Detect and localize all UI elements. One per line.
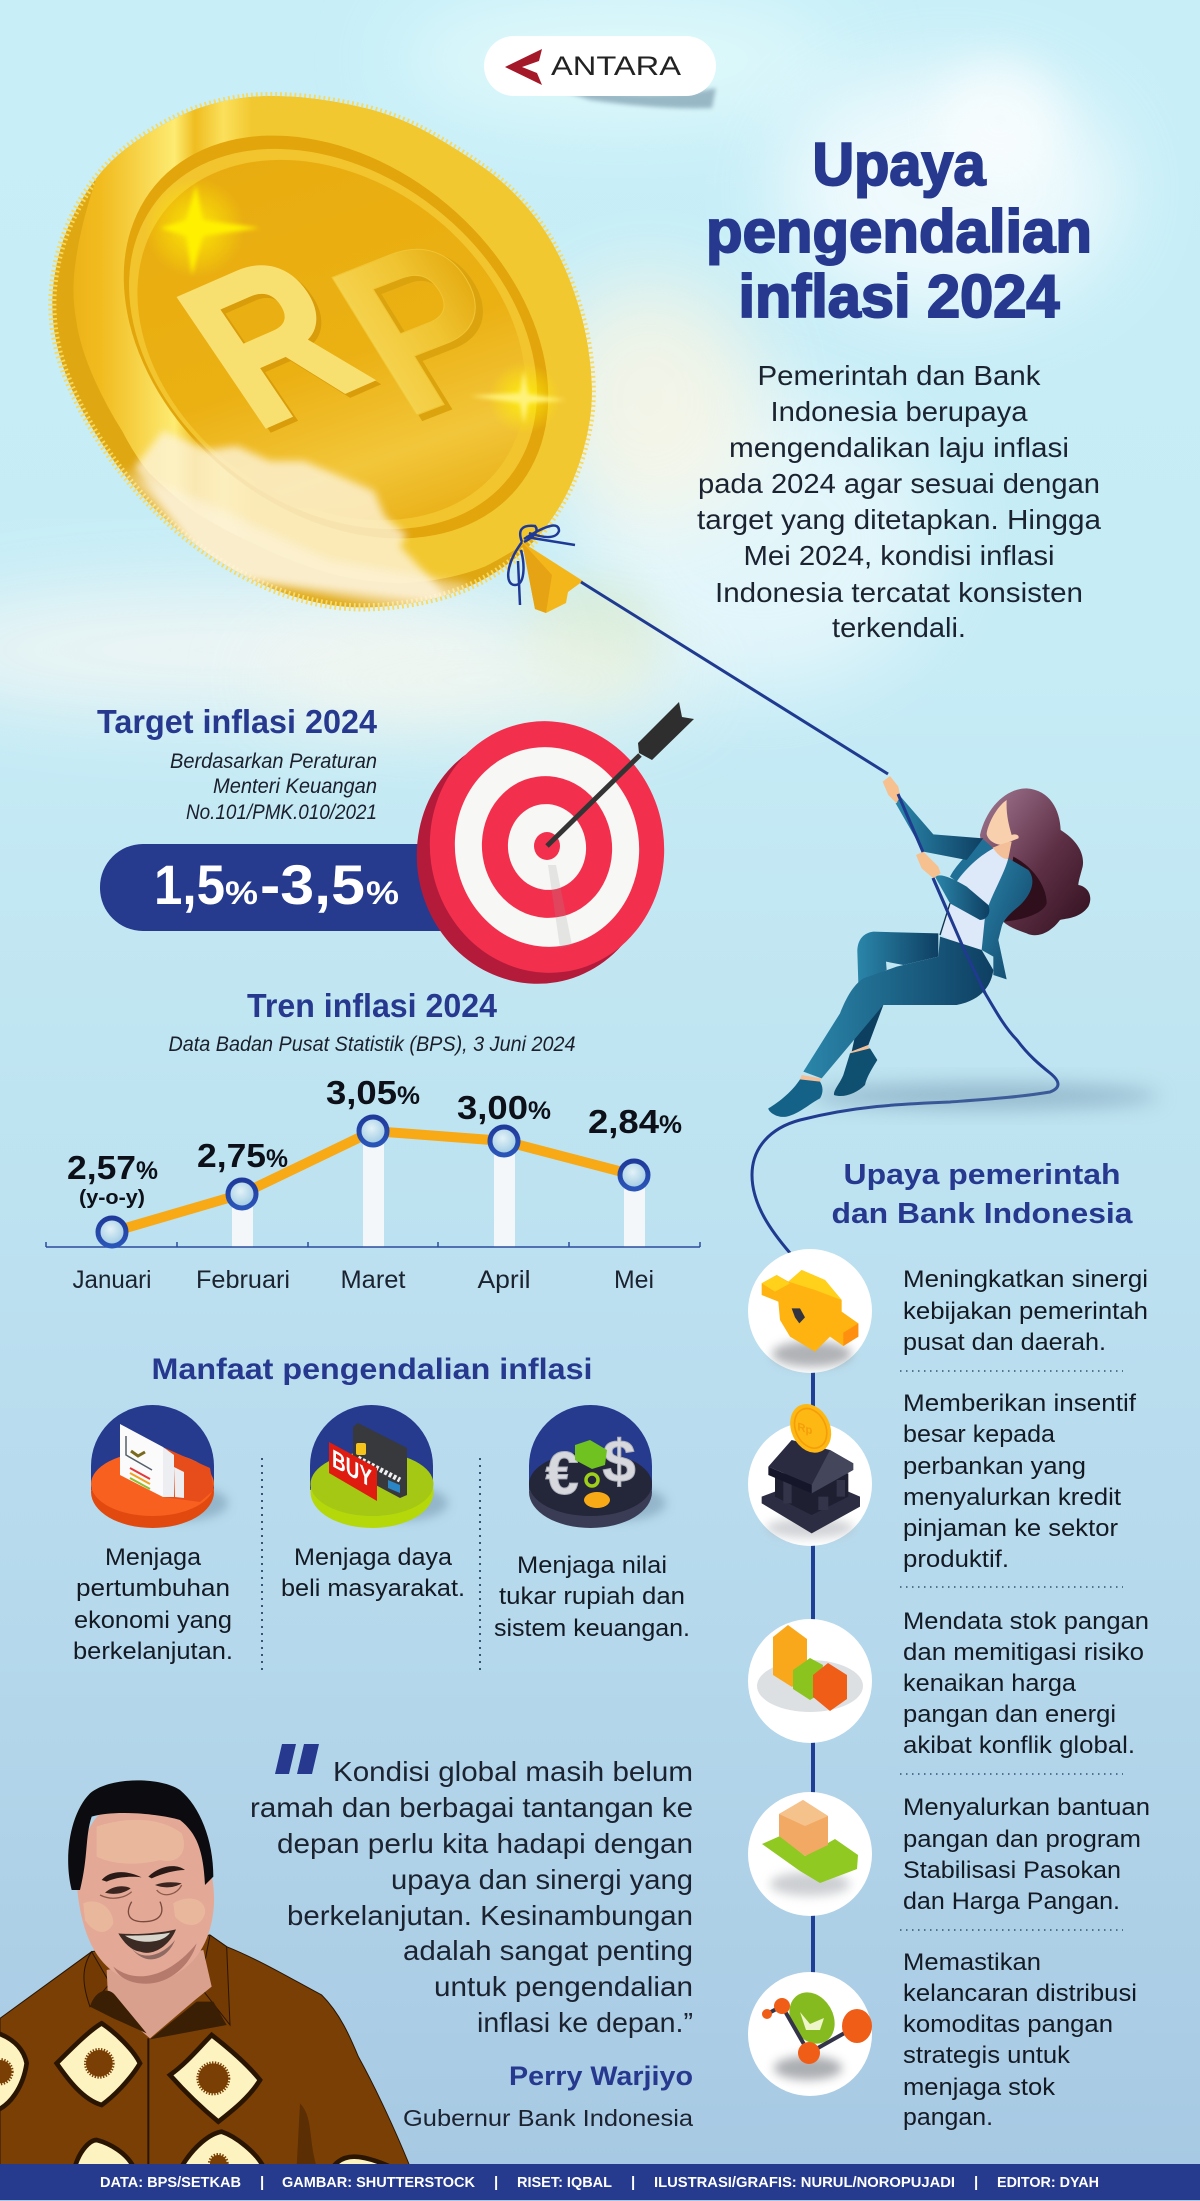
quote speaker role: Gubernur Bank Indonesia xyxy=(403,2105,693,2131)
step 5 text: kelancaran distribusi xyxy=(903,1980,1137,2007)
logo: ANTARA xyxy=(484,36,716,108)
step 3 text xyxy=(903,1608,1149,1759)
neck xyxy=(107,1950,212,2038)
target range pill xyxy=(100,844,500,931)
coin letters Rp: P xyxy=(293,190,557,463)
step 1 text: Meningkatkan sinergi xyxy=(903,1266,1148,1293)
step icon 1: yellow block xyxy=(748,1249,872,1373)
step 5 text xyxy=(903,1949,1137,2131)
icon: exchange rate: $ xyxy=(602,1428,636,1495)
step 4 text: Menyalurkan bantuan xyxy=(903,1794,1150,1821)
highlights xyxy=(83,1820,205,1932)
chart values: % xyxy=(136,1157,158,1185)
target source note: Menteri Keuangan xyxy=(213,775,377,798)
heading: Upaya pemerintah: Upaya pemerintah xyxy=(844,1159,1120,1191)
step 3 text: pangan dan energi xyxy=(903,1701,1116,1728)
ankles xyxy=(800,1045,869,1082)
target range pill: % xyxy=(366,875,399,911)
placket xyxy=(147,2038,150,2164)
ground shadow under woman xyxy=(810,1083,1160,1109)
intro paragraph xyxy=(697,360,1101,643)
hands xyxy=(883,776,941,878)
step 5 text: pangan. xyxy=(903,2104,993,2131)
coin letters Rp: P xyxy=(299,194,563,467)
step 3 text: Mendata stok pangan xyxy=(903,1608,1149,1635)
quote text: inflasi ke depan.” xyxy=(477,2007,693,2038)
front foot xyxy=(768,1079,822,1117)
rope in front of woman xyxy=(898,794,985,993)
step icon 4: food aid box xyxy=(748,1792,872,1916)
benefit text: purchasing power xyxy=(281,1544,465,1602)
upper arm xyxy=(896,797,983,860)
benefit text: exchange rate xyxy=(494,1552,690,1642)
chart values: 2,57 xyxy=(67,1149,136,1186)
icon: purchasing power card: BUY xyxy=(332,1444,372,1494)
benefit divider 1 xyxy=(261,1458,263,1671)
step 4 text xyxy=(903,1794,1150,1915)
logo: ANTARA: ANTARA xyxy=(551,51,681,81)
trend source note: Data Badan Pusat Statistik (BPS), 3 Juni 2024 xyxy=(168,1033,576,1056)
chart values xyxy=(67,1074,682,1209)
chart points xyxy=(98,1117,648,1246)
quote text: ramah dan berbagai tantangan ke xyxy=(250,1792,693,1823)
batik motifs xyxy=(0,2023,390,2167)
step 4 text: Stabilisasi Pasokan xyxy=(903,1857,1121,1884)
target source note xyxy=(170,750,377,824)
chart values: % xyxy=(659,1111,682,1139)
footer credits: EDITOR: DYAH xyxy=(997,2174,1099,2191)
intro paragraph: Mei 2024, kondisi inflasi xyxy=(744,540,1054,571)
chart month labels xyxy=(72,1266,654,1294)
quote speaker name: Perry Warjiyo xyxy=(509,2061,693,2091)
coin edge xyxy=(52,96,592,607)
background clouds xyxy=(0,0,1120,730)
chart values: % xyxy=(528,1097,551,1125)
brows xyxy=(102,1866,185,1882)
coin letters Rp: R xyxy=(147,215,407,475)
footer credits: | xyxy=(631,2174,635,2191)
step 5 text: strategis untuk xyxy=(903,2042,1071,2069)
footer credits: | xyxy=(260,2174,264,2191)
step 1 text xyxy=(903,1266,1148,1356)
coin letters Rp xyxy=(142,190,563,475)
chart month labels: Mei xyxy=(614,1266,654,1294)
step icon 5: distribution nodes xyxy=(748,1972,872,2096)
eyes xyxy=(105,1882,182,1894)
step dividers xyxy=(900,1371,1123,1930)
collar shadows xyxy=(90,1991,227,2039)
intro paragraph: mengendalikan laju inflasi xyxy=(729,432,1069,463)
chart bars xyxy=(232,1131,645,1247)
rope from balloon through woman to the list xyxy=(581,582,1058,1253)
step 1 text: kebijakan pemerintah xyxy=(903,1298,1148,1325)
illustration: woman pulling rope xyxy=(768,776,1090,1117)
benefit text: growth: pertumbuhan xyxy=(76,1575,230,1602)
title: pengendalian xyxy=(706,198,1092,265)
intro paragraph: Indonesia berupaya xyxy=(770,396,1028,427)
quote text: depan perlu kita hadapi dengan xyxy=(277,1828,693,1859)
step 3 text: akibat konflik global. xyxy=(903,1732,1135,1759)
back leg xyxy=(852,990,883,1052)
footer credits: | xyxy=(974,2174,978,2191)
intro paragraph: target yang ditetapkan. Hingga xyxy=(697,504,1101,535)
step 5 text: menjaga stok xyxy=(903,2074,1056,2101)
quote text: adalah sangat penting xyxy=(403,1935,693,1966)
intro paragraph: pada 2024 agar sesuai dengan xyxy=(698,468,1100,499)
timeline connector xyxy=(811,1370,815,1980)
chart values: 2,84 xyxy=(588,1103,660,1140)
jaw shadow xyxy=(113,1943,197,1984)
target source note: No.101/PMK.010/2021 xyxy=(186,801,377,824)
benefit text: exchange rate: sistem keuangan. xyxy=(494,1615,690,1642)
heading: Target inflasi: Target inflasi 2024 xyxy=(97,703,378,740)
benefit text: growth xyxy=(73,1544,233,1665)
illustration: golden coin balloon xyxy=(48,92,596,612)
quote text: upaya dan sinergi yang xyxy=(391,1864,693,1895)
chart values: (y-o-y) xyxy=(79,1187,145,1209)
step 4 text: pangan dan program xyxy=(903,1826,1141,1853)
intro paragraph: Indonesia tercatat konsisten xyxy=(715,577,1083,608)
footer credits: GAMBAR: SHUTTERSTOCK xyxy=(282,2174,475,2191)
step 3 text: kenaikan harga xyxy=(903,1670,1077,1697)
step 2 text: produktif. xyxy=(903,1546,1009,1573)
benefit text: growth: ekonomi yang xyxy=(74,1607,232,1634)
icon: exchange rate: € xyxy=(545,1440,579,1507)
icon: economic growth report xyxy=(91,1405,228,1528)
footer credits: | xyxy=(494,2174,498,2191)
step 2 text: Memberikan insentif xyxy=(903,1390,1136,1417)
step 5 text: Memastikan xyxy=(903,1949,1041,1976)
benefit text: exchange rate: tukar rupiah dan xyxy=(499,1583,685,1610)
sparkle right xyxy=(470,362,566,434)
cloud over coin xyxy=(120,431,470,620)
strap xyxy=(940,903,950,935)
back foot xyxy=(834,1048,877,1096)
footer credits: ILUSTRASI/GRAFIS: NURUL/NOROPUJADI xyxy=(654,2174,955,2191)
quote text: Kondisi global masih belum xyxy=(333,1756,693,1787)
icon: target with arrow xyxy=(397,702,694,1003)
step icon 2: bank xyxy=(748,1397,872,1546)
step icon 2: bank: Rp xyxy=(797,1421,812,1437)
coin on bank xyxy=(782,1397,839,1459)
target range pill: % xyxy=(225,875,258,911)
heading: Tren inflasi: Tren inflasi 2024 xyxy=(247,987,498,1024)
nose xyxy=(128,1902,162,1922)
mouth xyxy=(118,1929,176,1953)
title: Upaya xyxy=(812,131,986,198)
quote text xyxy=(250,1756,693,2038)
icon: purchasing power card xyxy=(310,1405,448,1528)
line chart: monthly inflation xyxy=(46,1074,700,1294)
benefit text: purchasing power: Menjaga daya xyxy=(294,1544,453,1571)
chart month labels: Februari xyxy=(196,1266,290,1294)
lower arm xyxy=(935,875,989,920)
step 5 text: komoditas pangan xyxy=(903,2011,1113,2038)
step 4 text: dan Harga Pangan. xyxy=(903,1888,1120,1915)
chart values: 3,00 xyxy=(457,1089,528,1126)
heading: Upaya pemerintah xyxy=(832,1159,1133,1230)
balloon knot xyxy=(508,526,583,613)
chart month labels: Maret xyxy=(340,1266,406,1294)
chart values: 3,05 xyxy=(326,1074,397,1111)
title: inflasi 2024 xyxy=(738,263,1060,330)
chart values: % xyxy=(397,1082,420,1110)
shirt xyxy=(942,848,1008,950)
quote mark xyxy=(275,1744,319,1774)
step 2 text: pinjaman ke sektor xyxy=(903,1515,1118,1542)
step 2 text: menyalurkan kredit xyxy=(903,1484,1121,1511)
icon: exchange rate xyxy=(529,1405,666,1528)
batik centres xyxy=(0,2050,228,2172)
step 2 text xyxy=(903,1390,1136,1573)
front leg xyxy=(803,937,993,1078)
chart month labels: April xyxy=(478,1266,530,1294)
target source note: Berdasarkan Peraturan xyxy=(170,750,377,773)
quote text: berkelanjutan. Kesinambungan xyxy=(287,1900,693,1931)
chart values: 2,75 xyxy=(197,1137,266,1174)
title xyxy=(706,131,1092,330)
intro paragraph: terkendali. xyxy=(832,612,966,643)
step 1 text: pusat dan daerah. xyxy=(903,1329,1106,1356)
benefit text: exchange rate: Menjaga nilai xyxy=(517,1552,667,1579)
heading: Manfaat: Manfaat pengendalian inflasi xyxy=(152,1353,592,1386)
footer credits: DATA: BPS/SETKAB xyxy=(100,2174,241,2191)
intro paragraph: Pemerintah dan Bank xyxy=(758,360,1042,391)
benefit text: growth: Menjaga xyxy=(105,1544,202,1571)
shirt fold xyxy=(297,2103,317,2167)
target range pill: 1,5 xyxy=(154,853,225,916)
hair xyxy=(68,1780,213,1890)
target range pill: -3,5 xyxy=(260,853,365,916)
coin face rim xyxy=(73,96,592,583)
step 2 text: perbankan yang xyxy=(903,1453,1086,1480)
portrait: Perry Warjiyo xyxy=(0,1780,410,2172)
chart month labels: Januari xyxy=(72,1266,152,1294)
heading: Upaya pemerintah: dan Bank Indonesia xyxy=(832,1198,1133,1230)
face xyxy=(77,1803,214,1982)
collar xyxy=(950,839,993,882)
jacket xyxy=(982,858,1032,979)
step 2 text: besar kepada xyxy=(903,1421,1056,1448)
hair xyxy=(980,788,1090,935)
benefit divider 2 xyxy=(479,1458,481,1671)
sparkle top xyxy=(145,178,260,278)
benefit text: purchasing power: beli masyarakat. xyxy=(281,1575,465,1602)
footer credits xyxy=(0,2164,1200,2200)
face xyxy=(987,800,1019,845)
neck xyxy=(992,842,1012,859)
footer credits: RISET: IQBAL xyxy=(517,2174,612,2191)
chart values: % xyxy=(266,1145,288,1173)
quote text: untuk pengendalian xyxy=(434,1971,693,2002)
benefit text: growth: berkelanjutan. xyxy=(73,1638,233,1665)
shirt xyxy=(0,1935,410,2167)
step icon 3: stock blocks xyxy=(748,1619,872,1743)
step 3 text: dan memitigasi risiko xyxy=(903,1639,1144,1666)
coin letters Rp: R xyxy=(142,211,402,471)
